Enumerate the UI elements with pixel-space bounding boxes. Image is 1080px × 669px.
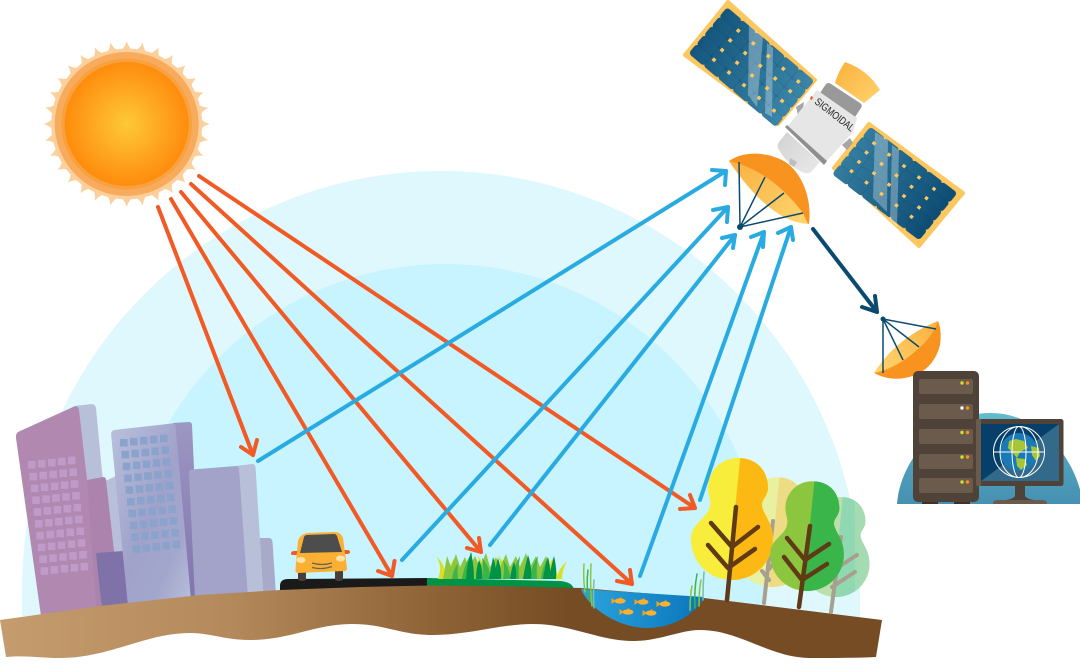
small purple block: [96, 551, 130, 610]
icon: green tree: [770, 481, 844, 610]
satellite dish: [729, 154, 810, 230]
centre tower front: [111, 423, 191, 606]
globe: [994, 426, 1044, 478]
tall building windows: [28, 457, 88, 575]
logo text: SIGMOIDAL: [812, 96, 857, 134]
monitor stand: [1006, 485, 1034, 500]
panel cells: [832, 127, 957, 240]
panel cells: [689, 7, 814, 127]
red arrow to grass: [181, 192, 481, 552]
icon: yellow tree: [691, 458, 773, 602]
canopy: [747, 477, 798, 587]
sun ring: [61, 58, 192, 190]
screen: [981, 424, 1059, 481]
pond reeds right: [690, 572, 704, 610]
top collar: [820, 83, 862, 120]
wheels: [298, 570, 343, 581]
fish 4: [620, 608, 634, 615]
server rack: [913, 371, 979, 504]
solar panel lower: [832, 124, 963, 246]
monitor base: [993, 500, 1047, 504]
logo mark: [810, 96, 813, 100]
feed point: [880, 316, 886, 322]
trunk and branches: [708, 507, 758, 600]
panel frame: [834, 124, 963, 246]
panel reflection: [748, 25, 773, 117]
dish inner lens: [874, 321, 938, 373]
dish shell: [874, 321, 941, 379]
ground: [0, 586, 882, 658]
downlink arrow: [813, 229, 877, 312]
icon: sun: [44, 41, 210, 207]
red arrow to road: [171, 199, 394, 576]
trunk and branches: [762, 521, 784, 603]
city buildings: [16, 404, 276, 616]
red arrow to pond: [191, 184, 632, 584]
africa: [1031, 446, 1040, 461]
centre tower side: [173, 422, 200, 600]
inner atmosphere dome: [125, 264, 765, 616]
south america: [1016, 458, 1027, 470]
panel frame: [685, 2, 815, 124]
blue arrow from grass: [490, 235, 735, 545]
tall building front: [16, 406, 102, 616]
fish 1: [612, 597, 626, 604]
fish 5: [642, 609, 656, 616]
panel connectors: [796, 102, 853, 150]
ground dish: [874, 316, 941, 379]
yellow blades: [436, 555, 567, 579]
icon: pale green tree: [816, 497, 870, 614]
monitor frame: [976, 419, 1064, 486]
mid green blades: [452, 553, 548, 579]
computer monitor: [976, 419, 1064, 504]
road: [280, 578, 430, 592]
blue arrow from pond: [640, 232, 764, 576]
dish shell: [729, 154, 810, 224]
outer atmosphere dome: [22, 171, 860, 620]
blue arrow from city: [258, 170, 726, 461]
main body: [787, 90, 857, 163]
short tower far right: [258, 538, 276, 595]
sun core: [65, 62, 189, 186]
wide building front: [189, 466, 248, 600]
icon: grass tufts: [436, 552, 567, 579]
feed lines: [739, 162, 803, 227]
blue arrow from road: [402, 207, 728, 560]
mid mauve block: [87, 477, 115, 606]
antenna horn: [835, 62, 880, 103]
icon: car: [291, 532, 350, 581]
north america: [1008, 439, 1028, 458]
grid lines: [994, 426, 1044, 478]
ocean: [1000, 433, 1038, 471]
fish 3: [656, 600, 670, 607]
branches: [831, 537, 857, 612]
status lights: [960, 381, 969, 484]
fish: [612, 597, 670, 616]
car body: [295, 532, 347, 573]
panel reflection: [873, 132, 899, 227]
canopy: [816, 497, 870, 597]
blue arrow from trees: [700, 227, 793, 500]
centre tower windows: [120, 435, 180, 553]
blue reflected radiation arrows: [258, 170, 793, 576]
grille: [312, 563, 332, 569]
canopy: [691, 458, 773, 580]
pond reeds left: [584, 564, 594, 608]
satellite: [685, 2, 963, 246]
drive bays: [919, 379, 973, 493]
frame left edge: [976, 419, 981, 486]
icon: pale yellow tree: [747, 477, 798, 605]
screen glare: [981, 424, 1059, 481]
light green blades: [443, 553, 553, 579]
canopy: [770, 481, 844, 591]
red arrow to city: [158, 207, 257, 455]
sun corona: [55, 52, 199, 196]
mirrors: [291, 550, 350, 555]
feed lines: [883, 319, 936, 373]
dish inner lens: [729, 161, 808, 224]
feed point: [737, 224, 743, 230]
headlights: [296, 557, 306, 563]
windshield: [300, 534, 342, 553]
ground station mound: [897, 413, 1080, 504]
panel sparkles: [713, 30, 801, 113]
rack feet: [922, 500, 970, 504]
rack body: [913, 371, 979, 502]
lower barrel: [778, 132, 820, 173]
fish 2: [634, 598, 648, 605]
red incoming radiation arrows: [158, 176, 695, 584]
wide building side: [236, 464, 264, 595]
red arrow to trees: [199, 176, 695, 509]
solar panel upper: [685, 2, 815, 127]
stub: [789, 158, 797, 167]
dark green blades: [466, 552, 556, 579]
trunk and branches: [784, 526, 829, 607]
tall building rear face: [70, 404, 124, 610]
body lower band: [785, 125, 827, 165]
panel sparkles: [850, 142, 937, 219]
grass strip: [427, 578, 574, 590]
sun spikes: [44, 41, 210, 207]
pond: [581, 589, 704, 628]
